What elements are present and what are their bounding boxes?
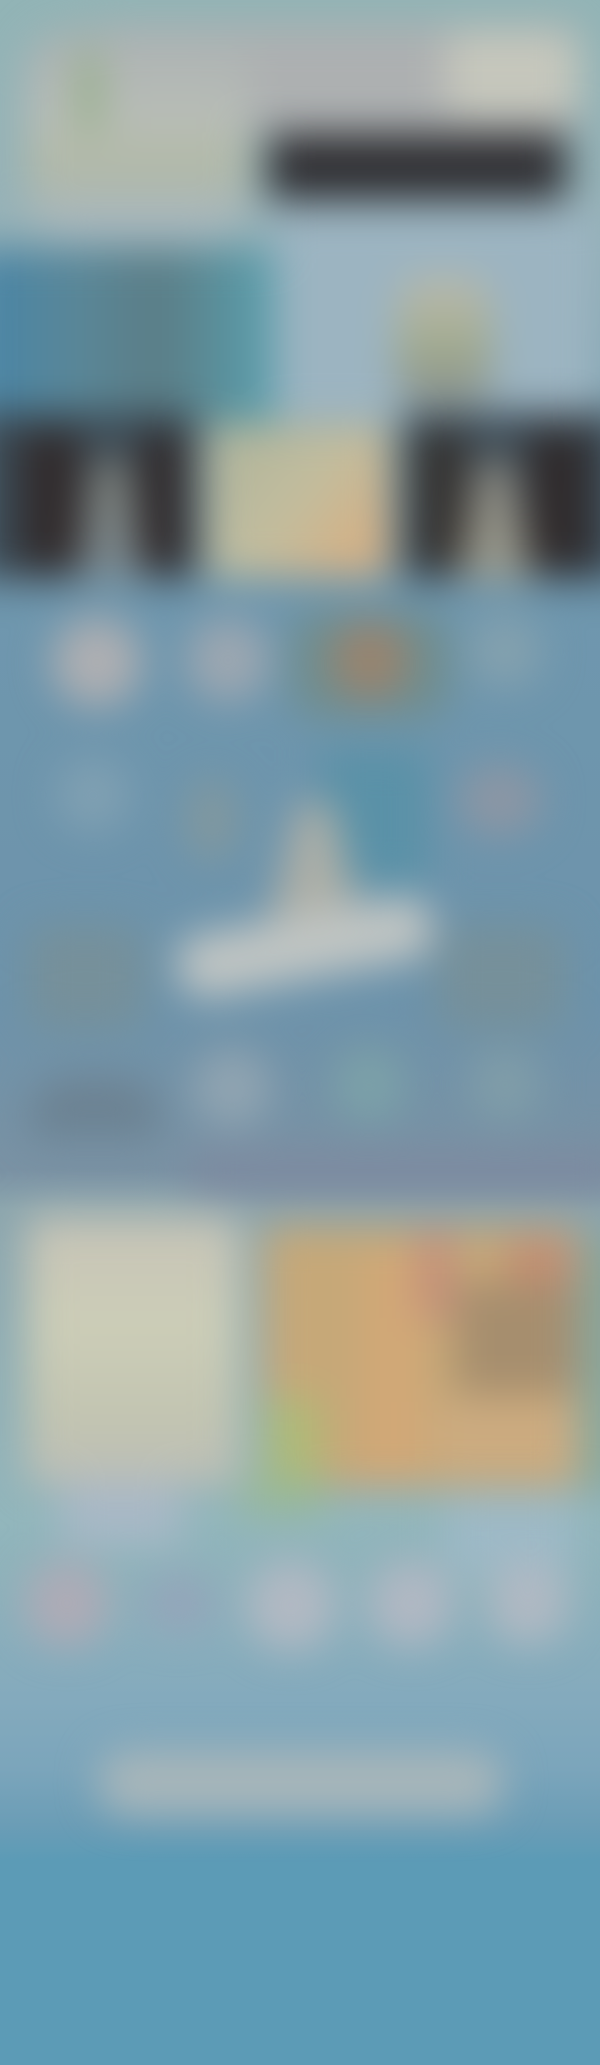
dark column: [413, 430, 467, 572]
centre illustration: [156, 783, 454, 1020]
top right highlight: [445, 32, 580, 116]
icon: tinted area behind circle: [290, 612, 450, 718]
panel: cream centre card: [207, 424, 389, 576]
panel: cream card: [26, 1216, 240, 1486]
dark column: [138, 430, 190, 572]
right green edge: [590, 1240, 600, 1490]
pale base: [434, 1402, 574, 1470]
lower divider band: [190, 1152, 600, 1192]
icon: right small figure: [396, 276, 492, 404]
panel: teal left block: [0, 250, 275, 430]
panel: dark right card: [403, 412, 600, 580]
panel: orange card: [264, 1226, 578, 1488]
icon: mound row 4: [30, 1078, 160, 1138]
icon: circle row 2 c: [458, 764, 542, 836]
pale strip: [445, 1495, 573, 1573]
icon: circle row 1 d: [468, 614, 542, 688]
icon: circle row 1 a: [52, 617, 142, 707]
icon: blob row 3 right: [436, 925, 566, 1030]
icon: bottom circle 4: [368, 1560, 454, 1646]
icon: bottom circle 5: [486, 1560, 570, 1644]
footer button: [98, 1750, 504, 1814]
panel: dark left card: [0, 412, 196, 580]
icon: circle row 4 b: [192, 1048, 272, 1128]
green glow below orange card: [240, 1478, 326, 1514]
dark column: [527, 430, 591, 572]
orange column: [364, 1251, 422, 1476]
icon: circle row 4 c: [332, 1048, 406, 1122]
panel: top left illustration: [26, 30, 250, 236]
top band: [90, 24, 580, 132]
icon: circle row 1 c: [331, 621, 409, 699]
caption strip: [61, 1482, 181, 1544]
rose highlight: [416, 1231, 456, 1319]
icon: bottom small oval: [142, 1574, 216, 1632]
sloped bar: [172, 892, 438, 1002]
rose highlight: [504, 1238, 574, 1340]
figure: [76, 460, 144, 580]
icon: slim oval: [186, 778, 238, 862]
figure peak: [264, 802, 366, 940]
green corner: [264, 1398, 320, 1492]
icon: bottom circle 1: [24, 1560, 110, 1646]
dark column: [20, 430, 82, 572]
icon: circle row 2 a: [56, 758, 130, 832]
shadow area: [456, 1284, 578, 1394]
panel: right pale column: [272, 208, 597, 420]
icon: green accent: [78, 52, 100, 132]
figure: [457, 460, 533, 580]
icon: bottom circle 3: [246, 1560, 336, 1650]
icon: circle row 4 d: [468, 1048, 542, 1122]
icon: circle row 1 b: [186, 618, 270, 702]
heading bar: [268, 134, 566, 200]
teal glow behind centre: [320, 750, 428, 885]
icon: blob row 3 left: [26, 925, 146, 1030]
